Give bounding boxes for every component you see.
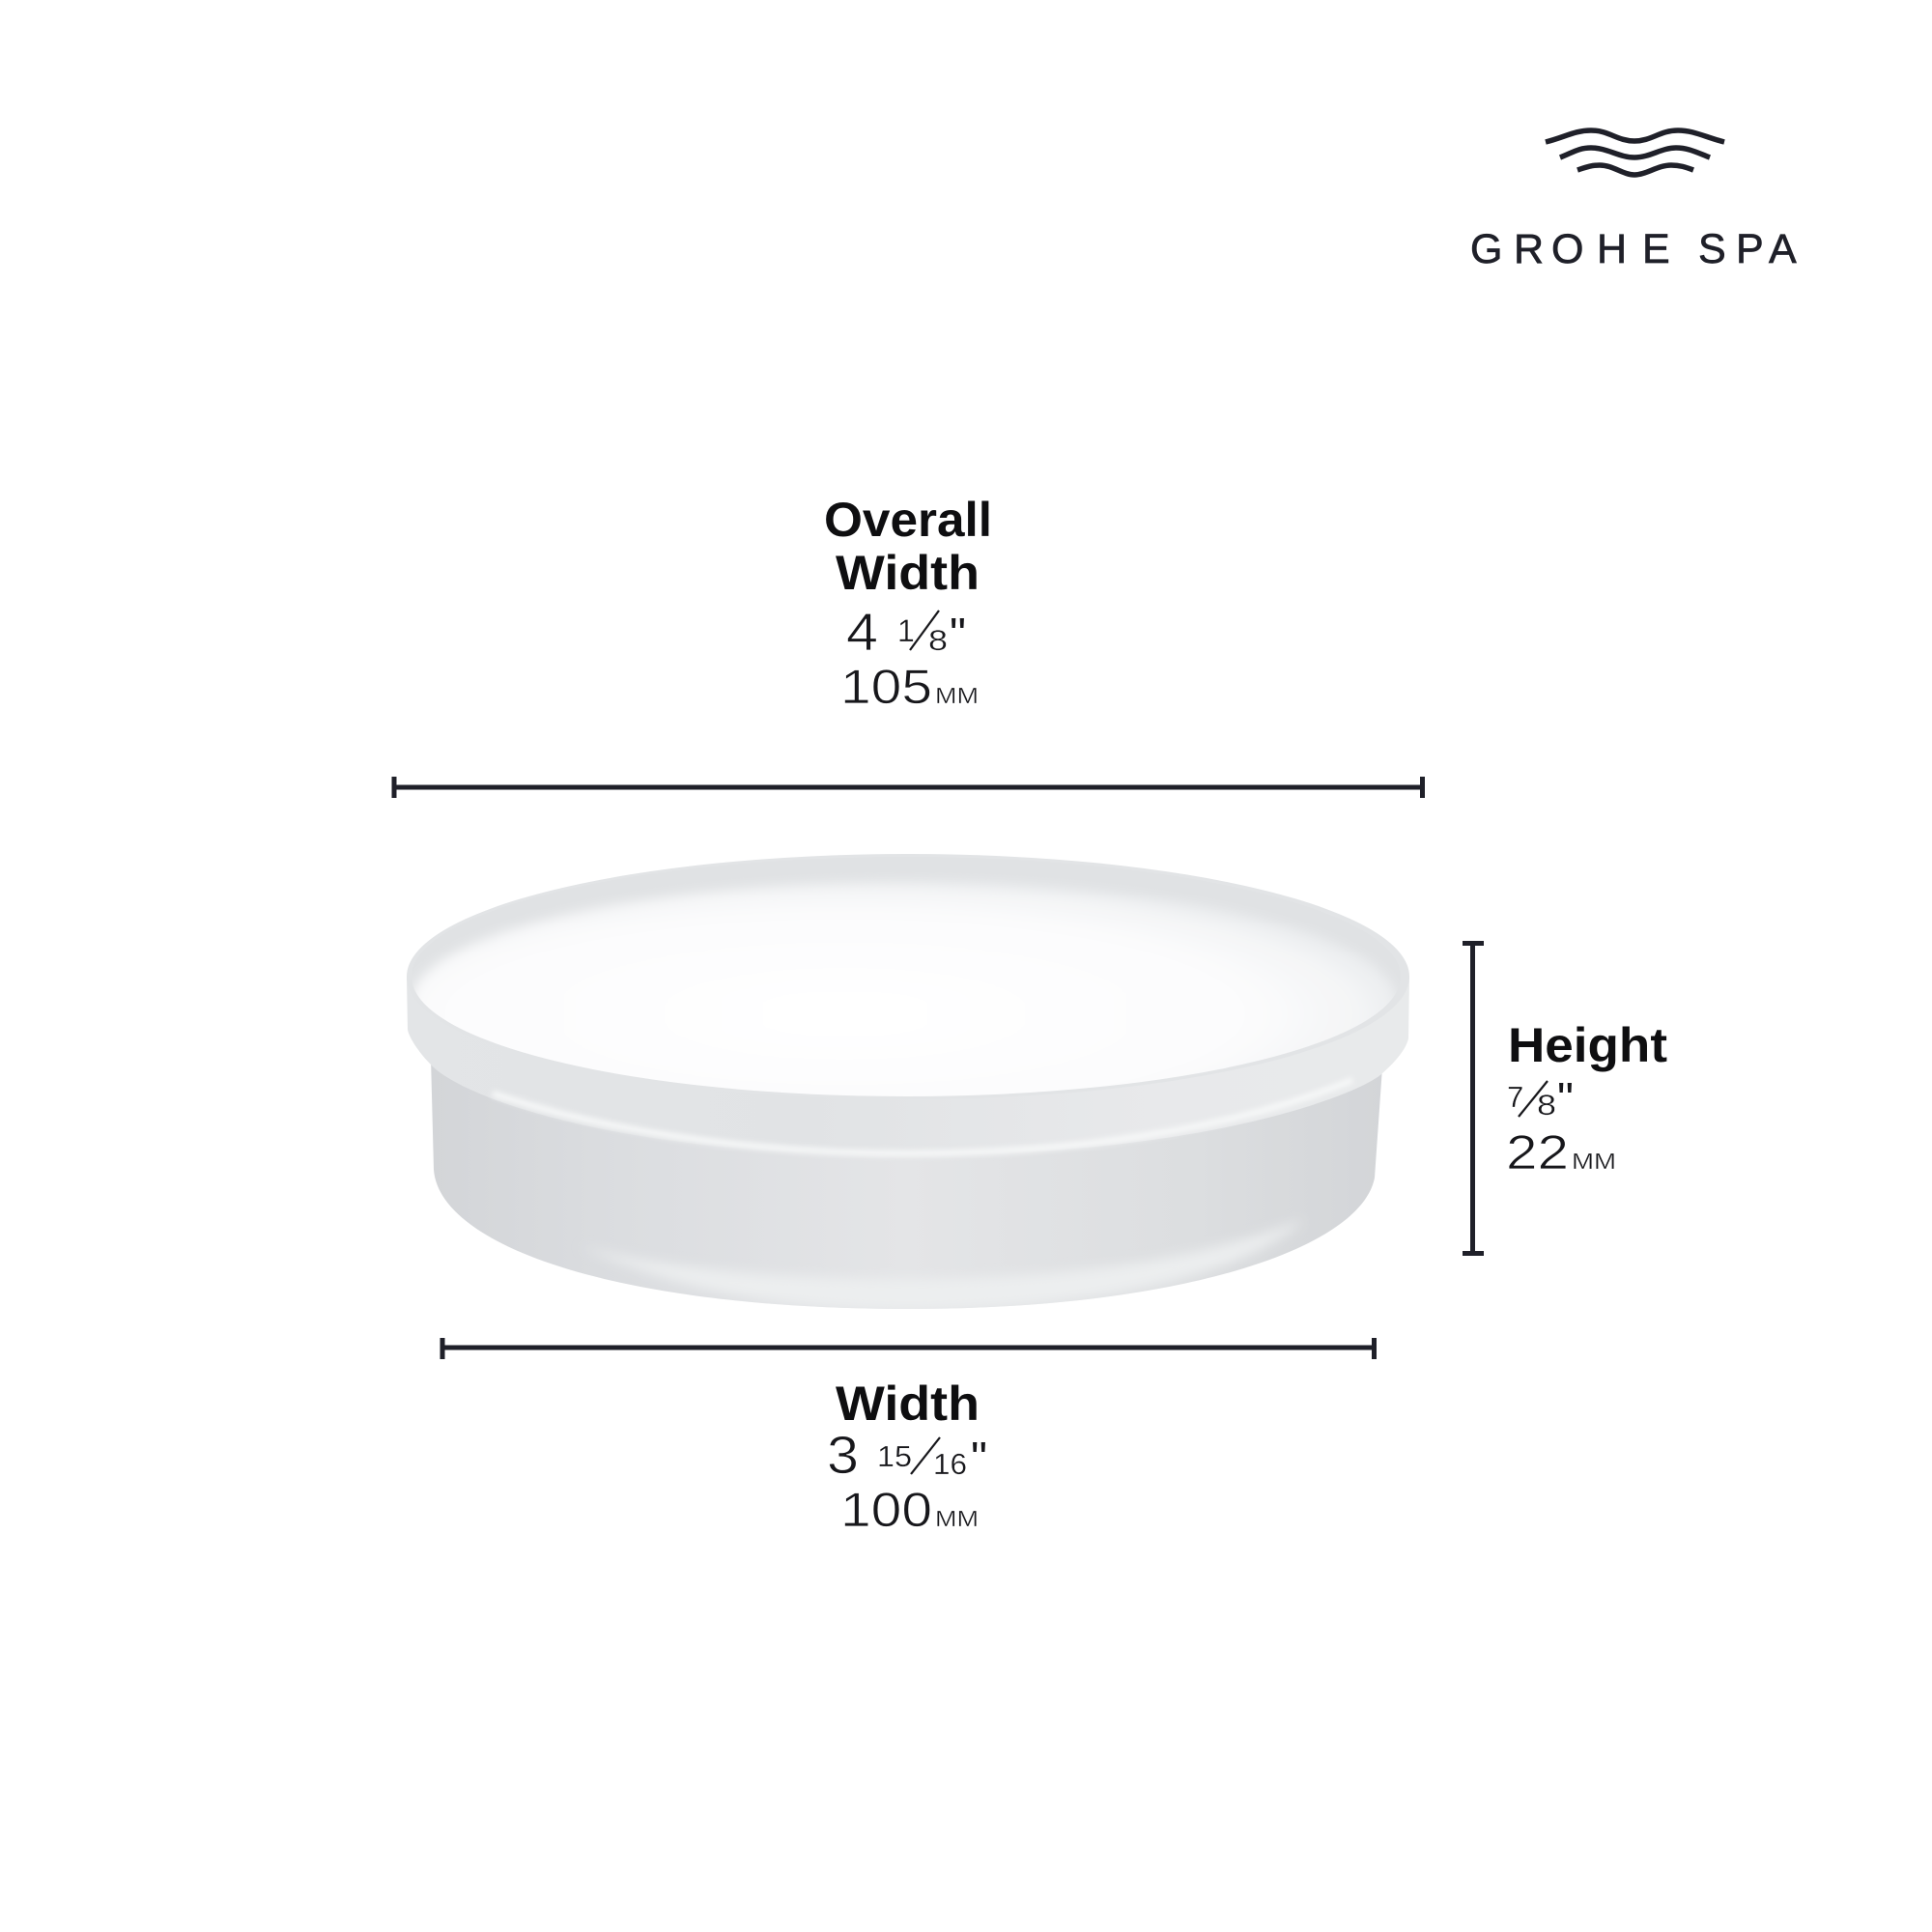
icon: three water waves [1546, 130, 1724, 175]
dish rim side [407, 977, 1409, 1155]
rim highlight line [493, 1080, 1352, 1153]
dimension line: overall width [392, 777, 1425, 798]
overall width inches: 1 [897, 613, 915, 648]
label: height [1506, 1018, 1667, 1179]
height inches: 8 [1537, 1090, 1556, 1122]
dish base highlight [625, 1227, 1289, 1305]
overall width heading: Overall [824, 493, 992, 547]
width millimetres [840, 1483, 979, 1537]
width millimetres: MM [935, 1506, 979, 1531]
height heading: Height [1508, 1018, 1667, 1072]
logo wordmark: GROHESPA [1470, 226, 1797, 272]
height millimetres [1506, 1125, 1616, 1179]
label: width [827, 1377, 987, 1537]
overall width heading [824, 493, 992, 600]
height millimetres: MM [1572, 1149, 1616, 1174]
product: frosted glass soap dish [406, 850, 1410, 1310]
width inches: 16 [933, 1447, 967, 1481]
label: overall width [824, 493, 992, 714]
height millimetres: 22 [1506, 1125, 1569, 1179]
width inches: " [971, 1433, 987, 1483]
overall width millimetres [840, 660, 979, 714]
dish body [431, 1058, 1382, 1309]
overall width inches [846, 602, 966, 662]
height inches: " [1557, 1073, 1574, 1123]
dish top surface [413, 883, 1391, 1096]
logo: Grohe Spa [1470, 130, 1797, 272]
height inches: 7 [1507, 1080, 1523, 1114]
dimension line: height [1463, 941, 1484, 1256]
overall width inches: 8 [928, 625, 948, 657]
width inches: 15 [877, 1439, 912, 1473]
width millimetres: 100 [840, 1483, 932, 1537]
width inches: 3 [827, 1425, 859, 1485]
dish top rim [407, 854, 1409, 1099]
overall width inches: " [950, 609, 966, 659]
overall width inches: 4 [846, 602, 878, 662]
dimension line: width [440, 1338, 1377, 1359]
overall width heading: Width [836, 546, 980, 600]
height inches [1507, 1073, 1574, 1123]
width heading: Width [836, 1377, 980, 1431]
overall width millimetres: MM [935, 683, 979, 708]
overall width millimetres: 105 [840, 660, 932, 714]
width inches [827, 1425, 987, 1485]
